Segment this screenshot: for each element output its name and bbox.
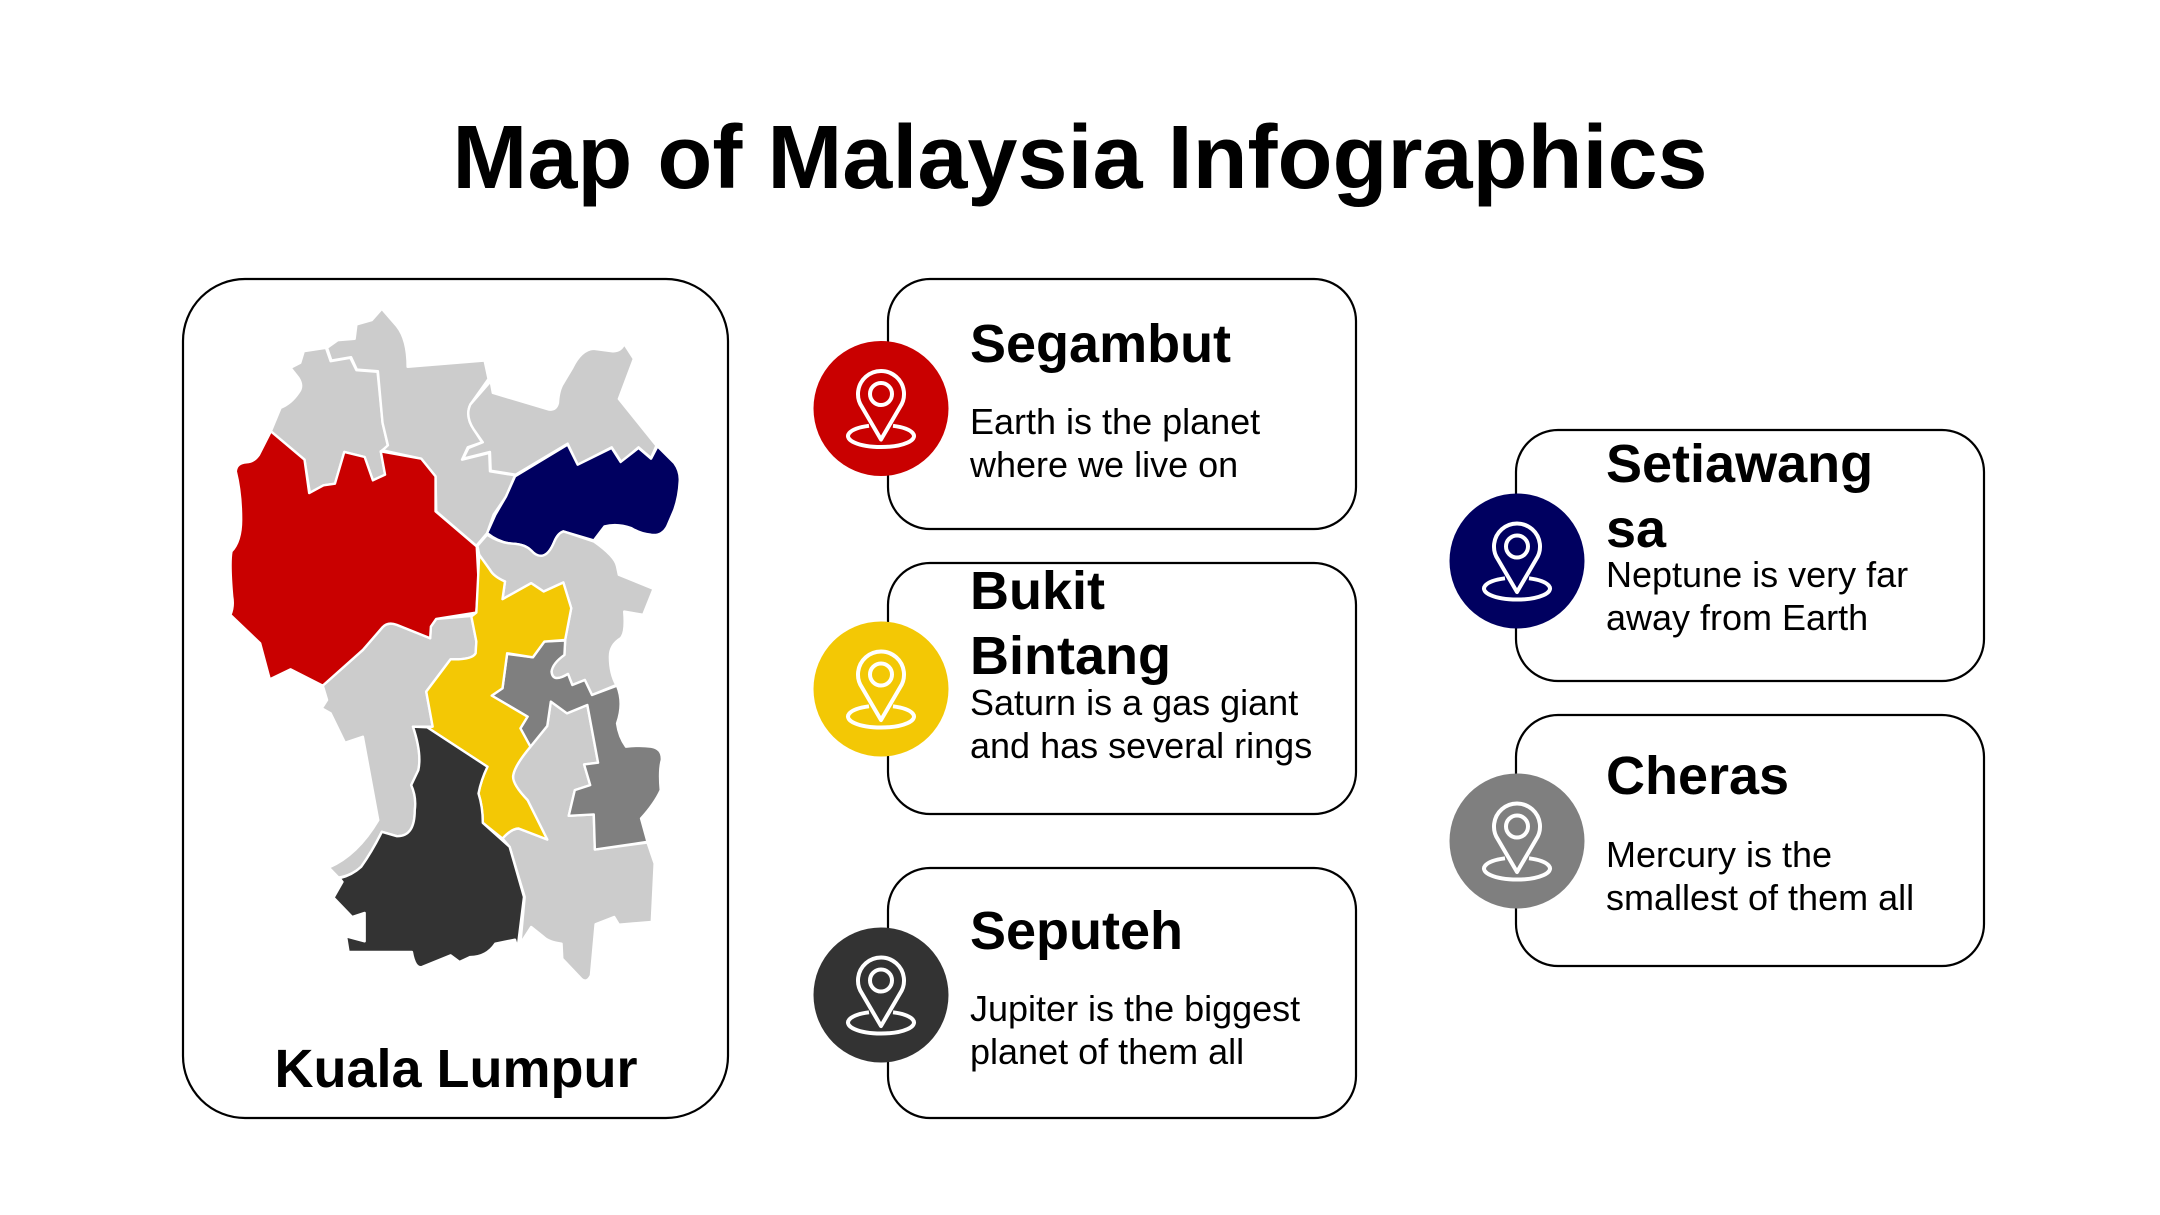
- description: away from Earth: [1606, 597, 1868, 638]
- region: Cheras grey: [492, 641, 662, 850]
- heading: Bukit: [970, 561, 1105, 621]
- description: where we live on: [969, 444, 1238, 485]
- region: Segambut red: [230, 431, 479, 686]
- region: Seputeh dark: [334, 727, 524, 967]
- map of Kuala Lumpur districts: [230, 309, 680, 981]
- region: north central grey: [327, 309, 515, 546]
- panel: Seputeh: [814, 868, 1356, 1118]
- heading: Segambut: [970, 314, 1231, 374]
- description: Mercury is the: [1606, 834, 1832, 875]
- description: Neptune is very far: [1606, 554, 1908, 595]
- region: west-southwest grey: [322, 616, 476, 878]
- icon: navy location pin: [1450, 494, 1584, 628]
- description: planet of them all: [970, 1031, 1244, 1072]
- title: Map of Malaysia Infographics: [452, 108, 1708, 208]
- panel: Kuala Lumpur map: [183, 279, 728, 1118]
- region: northwest grey: [271, 348, 388, 493]
- panel: Cheras: [1450, 715, 1984, 966]
- map label: Kuala Lumpur: [274, 1039, 638, 1099]
- region: south east grey: [502, 702, 655, 981]
- region: east grey: [477, 531, 654, 695]
- icon: yellow location pin: [814, 622, 948, 756]
- description: Jupiter is the biggest: [970, 988, 1300, 1029]
- icon: red location pin: [814, 341, 948, 476]
- region: Setiawangsa navy: [487, 445, 680, 556]
- description: Earth is the planet: [970, 401, 1260, 442]
- heading: Setiawang: [1606, 434, 1873, 494]
- heading: sa: [1606, 499, 1667, 559]
- icon: grey location pin: [1450, 774, 1584, 908]
- heading: Seputeh: [970, 901, 1183, 961]
- heading: Bintang: [970, 626, 1171, 686]
- region: Bukit Bintang yellow: [426, 555, 571, 840]
- description: and has several rings: [970, 725, 1312, 766]
- icon: dark location pin: [814, 928, 948, 1062]
- panel: Bukit Bintang: [814, 561, 1356, 814]
- panel: Setiawangsa: [1450, 430, 1984, 681]
- panel: Segambut: [814, 279, 1356, 529]
- heading: Cheras: [1606, 746, 1789, 806]
- description: smallest of them all: [1606, 877, 1914, 918]
- region: northeast grey: [463, 344, 656, 475]
- description: Saturn is a gas giant: [970, 682, 1298, 723]
